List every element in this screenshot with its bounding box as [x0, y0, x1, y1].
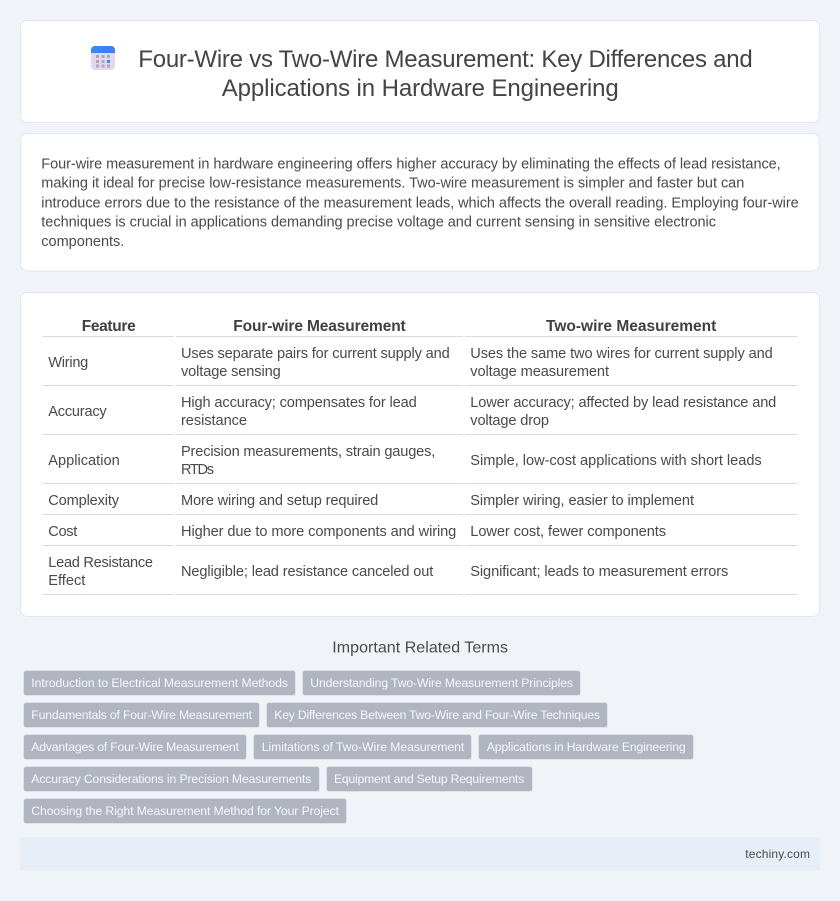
row: lead resistance effect [48, 555, 728, 589]
row: wiring: Wiring [48, 355, 88, 371]
heading: important related terms: Important Related Terms [332, 640, 508, 657]
chip [326, 766, 532, 792]
row: wiring: Uses separate pairs for current supply and [181, 346, 450, 362]
row: accuracy: voltage drop [470, 413, 549, 429]
title [138, 46, 753, 102]
text block: summary: making it ideal for precise low-resistance measurements. Two-wire measurement is simpler and faster but can [41, 175, 744, 191]
chip: Advantages of Four-Wire Measurement [31, 740, 240, 754]
chip [24, 670, 296, 696]
row: complexity [48, 493, 694, 509]
row: wiring: voltage measurement [470, 364, 609, 380]
text block: summary: components. [41, 234, 124, 250]
text block: summary [41, 156, 799, 250]
panel: summary paragraph [20, 134, 820, 271]
chip [24, 702, 260, 728]
panel: title header [20, 20, 820, 122]
chip: Fundamentals of Four-Wire Measurement [31, 708, 253, 722]
chip [24, 798, 346, 824]
table header row: Four-wire Measurement [233, 318, 406, 335]
icon: calendar [91, 46, 115, 70]
table header row: Feature [82, 318, 136, 335]
row: wiring [48, 346, 773, 380]
row: wiring: voltage sensing [181, 364, 281, 380]
row: accuracy: High accuracy; compensates for lead [181, 395, 417, 411]
row: wiring: Uses the same two wires for current supply and [470, 346, 773, 362]
chip [24, 766, 320, 792]
chip: Understanding Two-Wire Measurement Principles [310, 676, 573, 690]
chip: Introduction to Electrical Measurement Methods [31, 676, 288, 690]
row: cost [48, 524, 666, 540]
row: cost: Higher due to more components and wiring [181, 524, 456, 540]
chip [24, 734, 246, 760]
text block: summary: Four-wire measurement in hardware engineering offers higher accuracy by eliminating the effects of lead resistance, [41, 156, 781, 172]
row: cost: Cost [48, 524, 77, 540]
chip: Choosing the Right Measurement Method for Your Project [31, 804, 340, 818]
row: application: RTDs [181, 462, 214, 478]
table header row: Two-wire Measurement [546, 318, 716, 335]
row: cost: Lower cost, fewer components [470, 524, 666, 540]
chip: Limitations of Two-Wire Measurement [262, 740, 465, 754]
text block: summary: techniques is crucial in applications demanding precise voltage and current sensing in sensitive electronic [41, 214, 716, 230]
row: lead resistance effect: Lead Resistance [48, 555, 153, 571]
row: application: Simple, low-cost applications with short leads [470, 453, 762, 469]
row: lead resistance effect: Significant; leads to measurement errors [470, 564, 728, 580]
row: accuracy: Accuracy [48, 404, 107, 420]
chip [266, 702, 608, 728]
title: Applications in Hardware Engineering [222, 75, 619, 102]
row: application [48, 444, 762, 478]
row: application: Precision measurements, strain gauges, [181, 444, 435, 460]
chip: Applications in Hardware Engineering [487, 740, 686, 754]
chip: Key Differences Between Two-Wire and Four-Wire Techniques [274, 708, 600, 722]
text block: summary: introduce errors due to the resistance of the measurement leads, which affects the overall reading. Employing four-wire [41, 195, 799, 211]
row: accuracy [48, 395, 776, 429]
table header row [82, 318, 716, 335]
row: complexity: More wiring and setup required [181, 493, 378, 509]
row: accuracy: resistance [181, 413, 247, 429]
row: complexity: Complexity [48, 493, 120, 509]
panel: related term chips [24, 670, 694, 824]
row: lead resistance effect: Negligible; lead resistance canceled out [181, 564, 433, 580]
row: accuracy: Lower accuracy; affected by lead resistance and [470, 395, 776, 411]
footer source text: techiny.com [745, 847, 810, 861]
row: application: Application [48, 453, 120, 469]
chip: Accuracy Considerations in Precision Measurements [31, 772, 311, 786]
footer bar [20, 837, 820, 871]
title: Four-Wire vs Two-Wire Measurement: Key Differences and [138, 46, 753, 73]
row: lead resistance effect: Effect [48, 573, 85, 589]
panel: comparison table [20, 292, 820, 616]
chip: Equipment and Setup Requirements [334, 772, 524, 786]
chip [254, 734, 472, 760]
chip [478, 734, 694, 760]
row: complexity: Simpler wiring, easier to implement [470, 493, 694, 509]
chip [302, 670, 580, 696]
